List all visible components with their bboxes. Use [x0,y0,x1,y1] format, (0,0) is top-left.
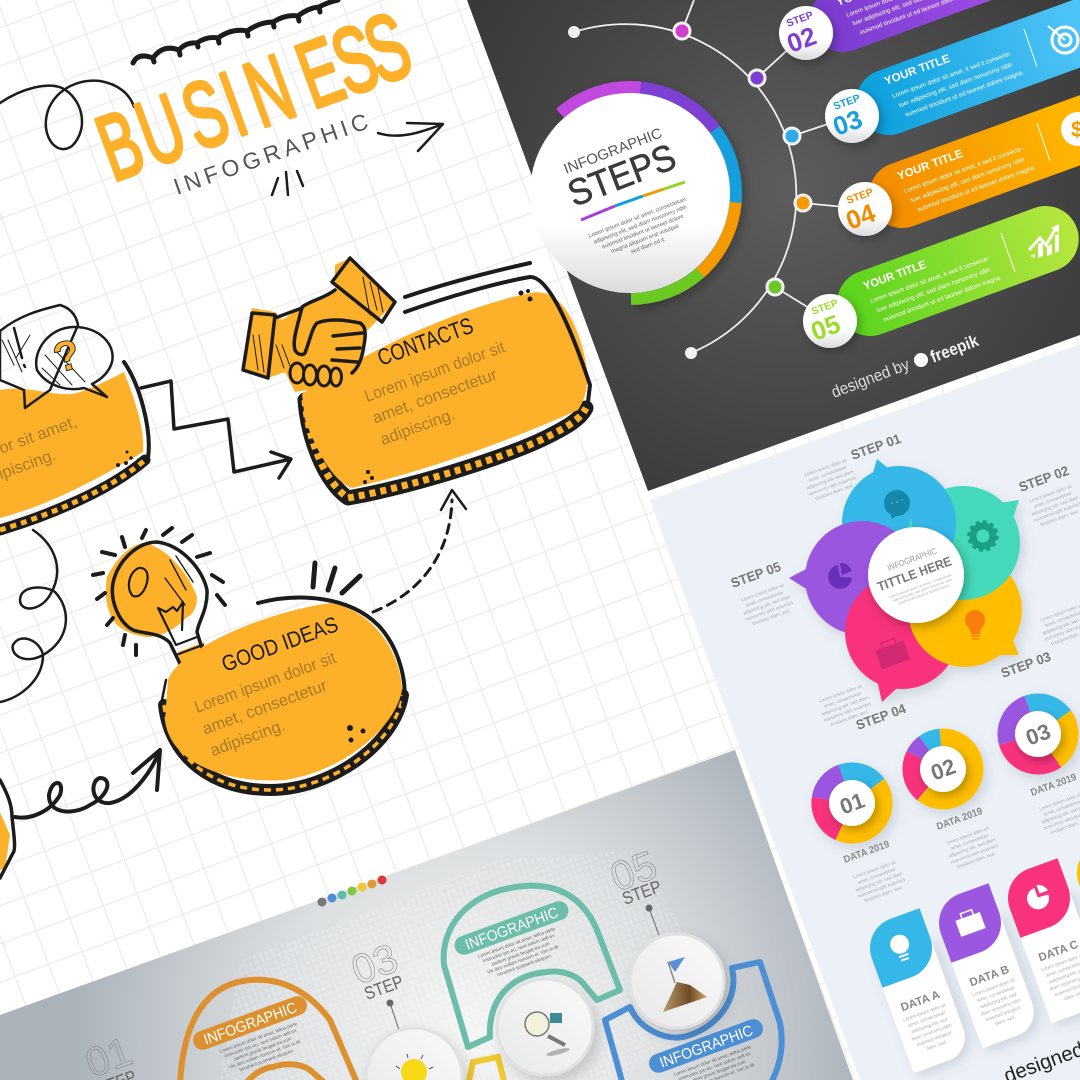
panel: questions card [0,362,149,530]
center circle body text: Lorem ipsum dolor sit amet, consectetuer [588,197,688,240]
petal: step 05 purple [789,521,919,635]
rainbow underline [581,182,685,220]
card: data B: amet, consectetuer [976,985,1016,1003]
icon: dollar coin [1061,112,1080,146]
caption: data 2019 first [842,839,908,905]
card: data C: DATA C [1037,939,1080,964]
caption: data 2019 second: Lorem ipsum dolor sit [946,825,990,846]
step 03 badge [825,89,879,143]
text block: step 01: amet, consectetuer [808,464,848,483]
loop squiggle left of title [0,81,134,149]
dots accent contacts [363,289,532,484]
text block: step 01: nonummy nibh euismod [808,475,857,497]
donut chart 01 [811,762,893,844]
central white circle: infographic steps: INFOGRAPHIC [562,126,665,178]
card: data A: diam nonummy nibh [911,1022,953,1042]
icon: briefcase pink [873,636,910,669]
text block: step 01: adipiscing elit, sed diam [806,469,854,491]
center circle body text: magna aliquam erat volutpat. [610,223,681,255]
step 03 badge: 03 [829,104,866,142]
card: data B [930,883,1041,1048]
orange body text: instructior pro eu, next solum velit ex [224,1028,298,1059]
spine endpoints [568,26,697,359]
card: data B: diam nonummy nibh [980,997,1022,1017]
green step bar: YOUR TITLE [862,259,928,293]
label: step 04: STEP 04 [854,701,908,733]
blue step bar [847,0,1080,144]
center circle: title here: euismod tincidunt ut laoreet dolore [897,583,950,606]
text block: step 01: Lorem ipsum dolor sit [804,457,848,478]
card: data C [999,858,1080,1023]
good ideas body text: amet, consectetur [200,676,330,738]
icon: briefcase white [954,907,986,937]
icon: light bulb [93,528,225,677]
text block: step 04: tincidunt diam. sed. [830,709,869,727]
dashed arrow to contacts [373,500,452,612]
petal: step 03 yellow [908,553,1022,667]
card: data A: amet, consectetuer [907,1010,947,1028]
center circle: title here: adipiscing elit, sed diam nonummy nibh [892,578,952,603]
panel: light flower infographic [650,344,1080,1080]
heading: good ideas: GOOD IDEAS [218,611,341,677]
text block: step 04: amet, consectetuer [823,690,863,709]
text block: step 02: amet, consectetuer [1033,490,1073,509]
caption: data 2019 third: DATA 2019 [1029,772,1079,799]
orange body text [219,1021,306,1076]
contacts body text: adipiscing. [378,405,457,449]
step 03 badge: STEP [832,92,862,113]
petal: step 02 teal [906,486,1020,600]
caption: data 2019 third [1029,772,1080,837]
circle: magnifier [497,979,593,1075]
step 05 badge: STEP [810,297,840,318]
caption: data 2019 second: amet, consectetuer [950,832,990,851]
icon: bulb white [887,932,914,963]
blue step bar: YOUR TITLE [883,53,952,88]
icon: gear [969,522,997,550]
contacts body text: Lorem ipsum dolor sit [362,338,508,406]
label: step 05: STEP 05 [729,559,783,591]
icon: handshake [243,258,395,392]
card: data B: diam. sed. [994,1014,1016,1026]
text block: step 05 [738,582,796,628]
step number 05: 05 [604,842,663,900]
good ideas body text [192,649,354,760]
icon: pie white [1023,882,1053,912]
zigzag arrow [141,381,291,478]
text block: step 03 [1037,602,1080,648]
spine arc [574,24,796,353]
icon: pie purple [828,563,852,589]
step 05 badge [803,294,857,348]
central white circle: infographic steps [530,93,730,293]
text block: step 05: tincidunt diam. sed. [752,608,791,626]
blue petal overlap [912,468,956,544]
dots accent questions [116,450,133,467]
teal body text: parlemi gravis feugiat ea cum [491,941,550,967]
center circle body text: sed diam ed it. [630,236,667,256]
step 04 badge [838,182,892,236]
accent ticks above card [313,563,360,593]
icon: target [1048,26,1078,53]
text block: step 05: adipiscing elit, sed diam [743,594,791,616]
dots accent [347,725,366,742]
step 04 badge: 04 [842,197,880,236]
center circle: title here: TITTLE HERE [875,553,954,594]
caption: data 2019 first: tincidunt diam. sed. [864,885,903,903]
blue arch [605,962,782,1080]
contacts body text [362,338,524,449]
caption: data 2019 first: nonummy nibh euismod [857,877,906,899]
center circle: title here: Lorem ipsum dolor sit amet, consectetuer [889,573,953,599]
label: step 01: STEP 01 [849,431,903,463]
spine nodes [674,23,811,295]
teal body text: hendrerit scripserit eloquen. [497,953,553,977]
card: data B: euismod tincidunt [985,1005,1022,1022]
teal arch [444,886,620,1047]
petal: step 01 blue [842,459,956,580]
icon: growth chart [1029,224,1059,258]
card: data B: DATA B [968,964,1011,989]
card: data D fragment [1068,833,1080,913]
teal infographic pill: INFOGRAPHIC [463,904,561,954]
green step bar [828,197,1080,345]
center circle body text: euismod tincidunt ut laoreet dolore [601,214,685,250]
orange body text: Vis dico nullam noncom et. Vim in illi [228,1039,301,1070]
caption: data 2019 second [935,806,1001,871]
panel: dark infographic steps [467,0,1080,491]
orange body text: hendrerit scripserit eloquen. [239,1048,295,1072]
blue infographic pill: INFOGRAPHIC [657,1022,755,1072]
teal body text: instructior pro eu, next solum velit ex [482,933,556,964]
blue step bar: euismod tincidunt ut ed laoreet dolore magna. [904,69,1025,119]
center circle body text [588,197,698,268]
credit: designed by freepik: designed by [829,355,913,402]
step number 03: STEP [362,971,406,1004]
orange infographic pill: INFOGRAPHIC [201,999,299,1049]
caption: data 2019 second: DATA 2019 [935,806,985,833]
fragment of bottom-left card [0,780,15,878]
donut chart 01: 01 [836,788,868,819]
card: data A: adipiscing elit, sed [910,1016,948,1034]
center circle body text: adipiscing elit, sed diam nonummy nibh [593,204,688,246]
card: data B: adipiscing elit, sed [979,991,1017,1009]
central ring [560,87,736,299]
circle: light bulb [366,1028,462,1080]
icon: speech bubbles: ? [48,330,85,382]
orange step bar [860,66,1080,237]
card: data A: diam. sed. [925,1039,947,1051]
blue step bar: tuer adipiscing elit, sed diam nonummy nibh [898,61,1014,109]
panel: good ideas card [162,563,405,790]
step number 03: 03 [345,935,404,993]
card: data A: DATA A [899,989,942,1014]
icon: bulb orange [965,610,985,640]
caption: data 2019 first: amet, consectetuer [857,866,897,885]
icon: chat bubble [884,490,910,519]
text block: step 04: Lorem ipsum dolor sit [819,683,863,704]
curly squiggle left [0,530,66,702]
green step bar: Lorem ipsum dolor sit amet, it sed it consecte- [869,255,990,305]
blue step bar: Lorem ipsum dolor sit amet, it sed it consecte- [891,50,1012,100]
caption: data 2019 second: adipiscing elit, sed diam [948,837,996,859]
center circle: title here: INFOGRAPHIC [886,546,938,573]
petal: step 04 pink [845,575,959,702]
card: data B: Lorem ipsum dolor sit [972,977,1016,997]
card: data A: euismod tincidunt [916,1030,953,1047]
looped arrow to good ideas [15,750,160,818]
flower petals [789,459,1022,702]
donut chart 03: 03 [1022,719,1054,750]
heading: contacts: CONTACTS [374,312,477,371]
good ideas body text: Lorem ipsum dolor sit [192,649,339,717]
text block: step 04: adipiscing elit, sed diam [821,695,869,717]
panel: contacts card [302,263,590,498]
caption: data 2019 first: adipiscing elit, sed diam [855,871,903,893]
step number 05 [604,842,664,935]
arrowhead of dashed arrow [441,490,466,510]
step 02 badge: STEP [785,9,815,30]
donut chart 02 [902,728,983,809]
text block: step 02: Lorem ipsum dolor sit [1029,483,1073,504]
good ideas body text: adipiscing. [208,716,287,760]
label: step 03: STEP 03 [999,649,1053,681]
step number 05: STEP [620,876,664,909]
text block: step 05: amet, consectetuer [745,589,785,608]
scalloped decoration above title [133,0,338,63]
step 02 badge [779,6,833,60]
icon: speech bubbles [0,305,113,408]
card: data A [861,908,972,1073]
text block: step 04: nonummy nibh euismod [823,701,872,723]
text block: step 02: nonummy nibh euismod [1033,501,1080,523]
central white circle: infographic steps: STEPS [562,136,681,214]
orange step bar: YOUR TITLE [896,148,965,183]
label: step 02: STEP 02 [1017,463,1071,495]
circle: flag on mountain [630,934,724,1028]
caption: data 2019 first: DATA 2019 [842,839,892,866]
text block: step 01: tincidunt diam. sed. [815,483,854,501]
step 04 badge: STEP [845,186,875,207]
orange step bar: euismod tincidunt ut ed laoreet dolore magna. [916,164,1037,214]
orange body text: Lorem ipsum dolor sit amet, tellus perle [219,1021,298,1054]
caption: data 2019 first: Lorem ipsum dolor sit [853,859,897,880]
step 05 badge: 05 [807,309,844,347]
text block: step 02: tincidunt diam. sed. [1040,509,1079,527]
arrow right of subtitle [378,123,443,151]
donut chart 02: 02 [927,754,959,785]
panel: gray roadmap infographic [0,750,853,1080]
text block: step 02: adipiscing elit, sed diam [1031,495,1079,517]
card: data A: Lorem ipsum dolor sit [903,1002,947,1022]
step 02 badge: 02 [783,21,820,59]
orange body text: parlemi gravis feugiat ea cum [233,1036,292,1062]
center circle: title here [868,527,964,623]
teal body text: Vis dico nullam noncom et. Vim in illi [486,944,559,975]
yellow connector fragment [468,1057,505,1080]
blue body text: Lorem ipsum dolor sit amet, tellus perle [673,1044,752,1077]
step number 03 [345,935,406,1030]
text block: step 02 [1026,483,1080,529]
text block: step 01 [801,457,859,503]
color dots row [318,876,386,906]
purple step bar [801,0,1080,61]
text block: step 04 [816,683,874,729]
subtitle: Infographic: INFOGRAPHIC [170,108,371,200]
teal body text [477,926,564,981]
accent ticks under subtitle [272,171,303,195]
donut chart 03 [998,693,1078,774]
contacts body text: amet, consectetur [370,365,500,427]
credit: designed by freepik [829,331,982,402]
green step bar: euismod tincidunt ut ed laoreet dolore magna. [882,274,1003,324]
green step bar: tuer adipiscing elit, sed diam nonummy nibh [876,266,992,314]
orange step bar: tuer adipiscing elit, sed diam nonummy nibh [910,156,1026,204]
orange arch [180,980,358,1080]
teal body text: Lorem ipsum dolor sit amet, tellus perle [477,926,556,959]
text block: step 05: Lorem ipsum dolor sit [741,582,785,603]
caption: data 2019 second: nonummy nibh euismod [950,843,999,865]
orange step bar: Lorem ipsum dolor sit amet, it sed it consecte- [903,145,1024,195]
connector lines [682,0,865,321]
text block: step 05: nonummy nibh euismod [745,600,794,622]
credit: designed by freepik: freepik [928,331,982,367]
caption: data 2019 second: tincidunt diam. sed. [957,851,996,869]
